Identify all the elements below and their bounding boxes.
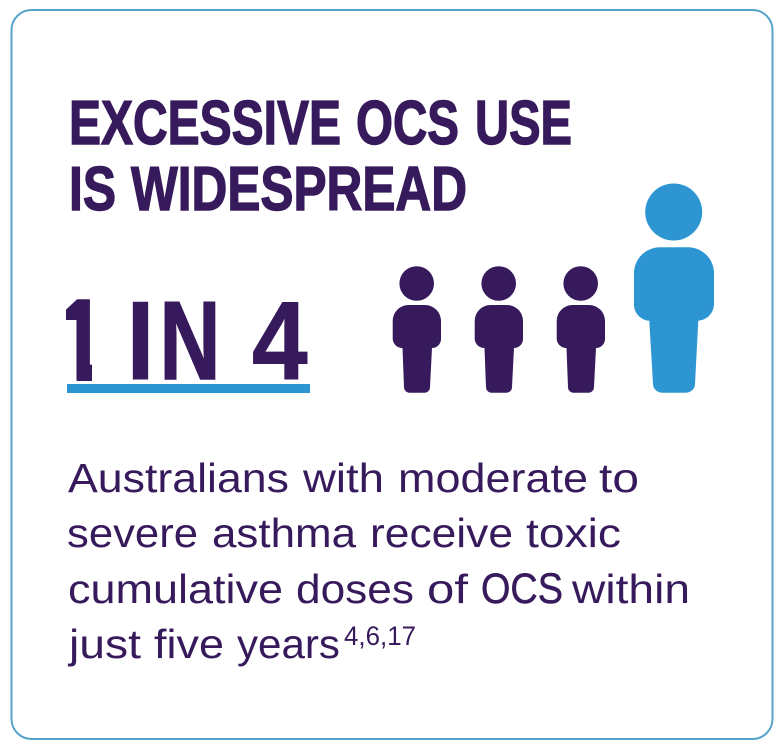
statistic: 1 in 4: N	[160, 279, 220, 403]
text block: description: moderate	[398, 455, 588, 501]
text block: description: Australians	[68, 455, 289, 501]
text block: description: asthma	[212, 510, 356, 556]
text block: description: five	[154, 621, 224, 667]
statistic: 1 in 4: 1	[59, 279, 102, 403]
text block: description: toxic	[526, 510, 621, 556]
icon: person 1	[393, 266, 441, 393]
statistic: 1 in 4	[66, 299, 310, 393]
icon: highlighted person	[634, 184, 714, 393]
text block: description: cumulative	[68, 566, 283, 612]
title: OCS	[356, 89, 459, 158]
title: EXCESSIVE	[69, 89, 341, 158]
text block: description: to	[599, 455, 639, 501]
title	[69, 89, 572, 224]
title: USE	[475, 89, 572, 158]
text block: description: receive	[370, 510, 513, 556]
text block: description: just	[68, 621, 142, 667]
icon: person 2	[475, 266, 523, 393]
statistic: 1 in 4: 4	[252, 279, 308, 403]
text block: description: severe	[67, 510, 198, 556]
text block: description: within	[571, 566, 690, 612]
text block: description	[67, 455, 690, 667]
title: IS	[69, 155, 116, 224]
text block: description: with	[302, 455, 384, 501]
text block: description: years	[237, 621, 340, 667]
text block: description: of	[427, 566, 469, 612]
text block: description: 4,6,17	[344, 621, 416, 651]
icon: row of four people	[393, 184, 714, 393]
icon: person 3	[557, 266, 605, 393]
statistic: 1 in 4: I	[127, 279, 154, 403]
text block: description: doses	[296, 566, 414, 612]
title: WIDESPREAD	[131, 155, 467, 224]
text block: description: OCS	[481, 565, 563, 613]
